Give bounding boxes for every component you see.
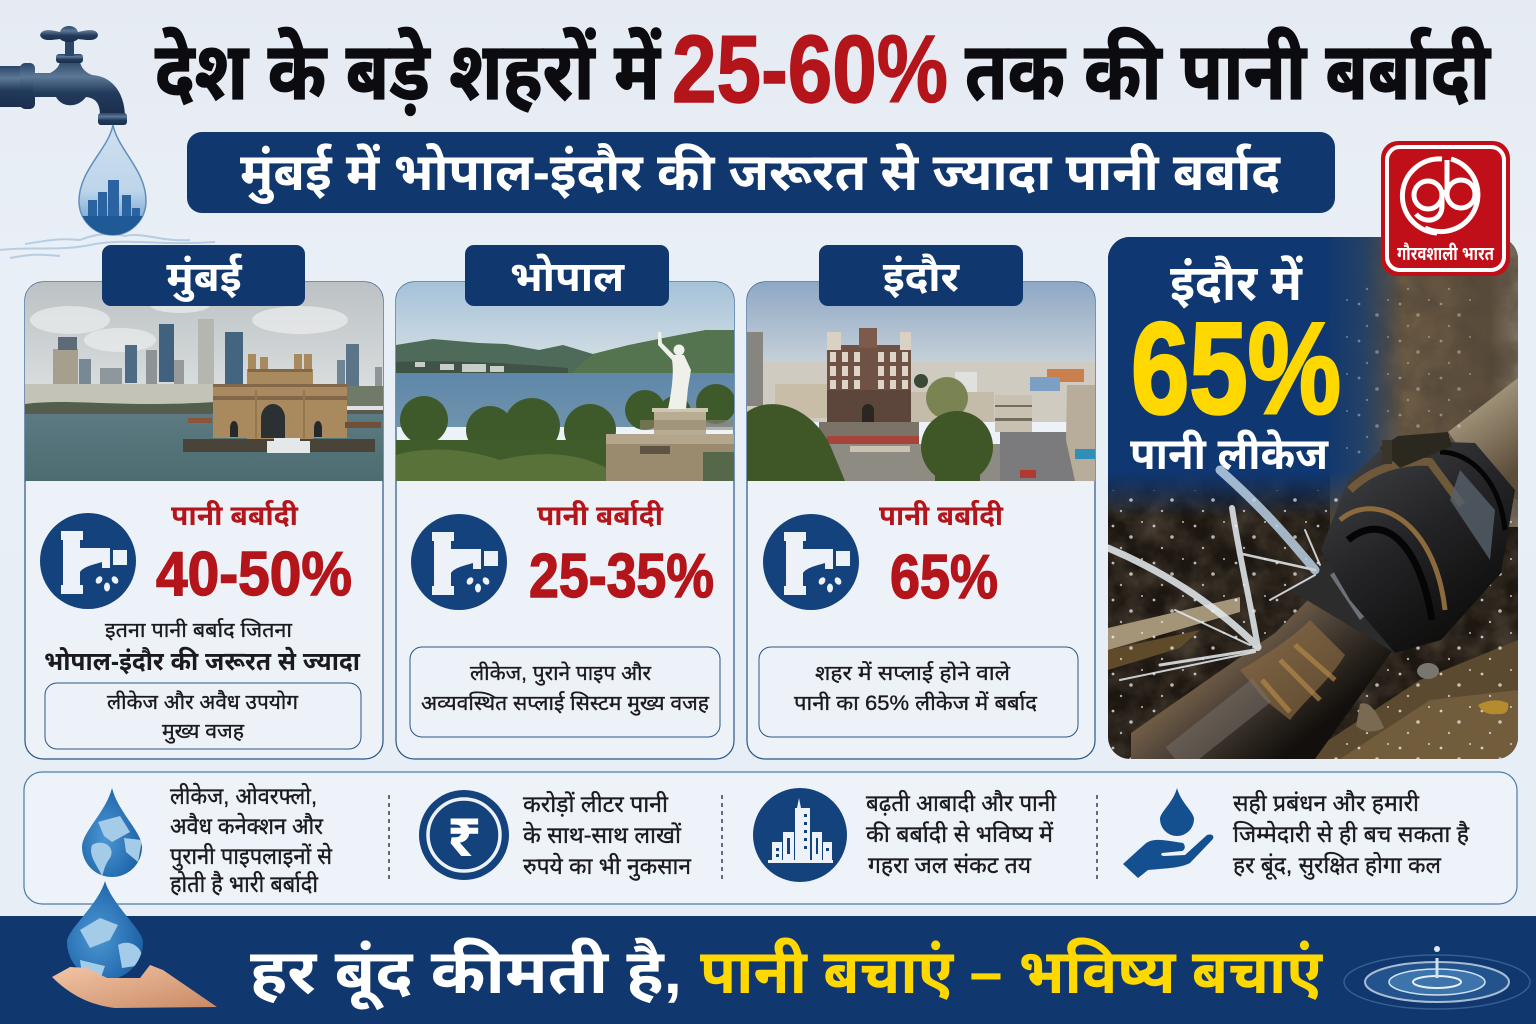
photo: leaking pipe xyxy=(1131,432,1515,770)
callout: Indore cause: पानी का 65% लीकेज में बर्बाद xyxy=(794,691,1038,715)
photo: Bhopal lake and statue xyxy=(396,282,736,481)
callout: Bhopal cause: लीकेज, पुराने पाइप और xyxy=(470,661,651,686)
photo: Indore Rajwada palace xyxy=(747,282,1095,483)
logo: Gauravshali Bharat: गौरवशाली भारत xyxy=(1397,243,1495,265)
callout: Indore cause xyxy=(759,647,1078,737)
panel: Indore 65% leakage: 65% xyxy=(1131,295,1341,441)
panel: Indore card xyxy=(747,245,1095,759)
slogan: पानी बचाएं – भविष्य बचाएं xyxy=(700,937,1323,1007)
icon: water drop with city xyxy=(78,125,148,236)
photo: wall and upper pipe xyxy=(1108,237,1518,759)
callout: Bhopal cause xyxy=(410,647,720,737)
text: responsibility xyxy=(1233,790,1470,880)
text: leakage causes: अवैध कनेक्शन और xyxy=(170,813,324,839)
icon: leaking pipe xyxy=(411,514,507,610)
stat: Indore water waste xyxy=(879,499,1004,612)
panel: Indore 65% leakage: पानी लीकेज xyxy=(1130,428,1329,479)
tab: Mumbai xyxy=(102,245,305,306)
text: responsibility: जिम्मेदारी से ही बच सकता है xyxy=(1233,821,1470,847)
panel: footer banner xyxy=(0,881,1536,1024)
slogan: हर बूंद कीमती है, xyxy=(250,936,682,1011)
slogan xyxy=(250,936,1323,1011)
panel: Indore 65% leakage: इंदौर में xyxy=(1170,255,1303,311)
text: money loss: के साथ-साथ लाखों xyxy=(523,822,682,848)
tab: Indore: इंदौर xyxy=(883,253,961,300)
icon: leaking pipe xyxy=(763,514,859,610)
tab: Bhopal xyxy=(465,245,669,306)
text: future crisis xyxy=(866,790,1057,878)
icon: faucet xyxy=(0,26,127,125)
stat: Mumbai water waste: पानी बर्बादी xyxy=(171,499,299,531)
title: देश के बड़े शहरों में xyxy=(155,26,662,116)
text: leakage causes: होती है भारी बर्बादी xyxy=(170,871,319,897)
icon: hand with drop xyxy=(1123,788,1213,878)
text: leakage causes: लीकेज, ओवरफ्लो, xyxy=(170,783,317,809)
navy overlay xyxy=(1108,237,1398,513)
text: leakage causes xyxy=(170,783,332,897)
tab: Bhopal: भोपाल xyxy=(510,253,625,300)
text: leakage causes: पुरानी पाइपलाइनों से xyxy=(170,843,332,871)
panel: Indore 65% leakage xyxy=(1108,237,1518,770)
stat: Bhopal water waste: पानी बर्बादी xyxy=(537,499,664,531)
text: responsibility: हर बूंद, सुरक्षित होगा कल xyxy=(1233,852,1441,880)
icon: globe drop xyxy=(82,788,142,877)
text: Mumbai comparison: इतना पानी बर्बाद जितना xyxy=(105,618,293,642)
icon: hand holding globe drop xyxy=(52,881,217,1008)
stat: Bhopal water waste: 25-35% xyxy=(529,542,714,611)
icon: rupee xyxy=(419,790,509,880)
panel: Bhopal card xyxy=(396,245,736,759)
icon: water ripple xyxy=(1344,946,1530,1009)
stat: Mumbai water waste xyxy=(156,499,352,609)
text: money loss xyxy=(523,791,692,881)
text: Mumbai comparison: भोपाल-इंदौर की जरूरत से ज्यादा xyxy=(44,646,361,676)
text: responsibility: सही प्रबंधन और हमारी xyxy=(1233,790,1420,816)
title: 25-60% xyxy=(672,16,948,123)
text: future crisis: बढ़ती आबादी और पानी xyxy=(866,790,1057,816)
logo: Gauravshali Bharat xyxy=(1381,141,1510,276)
icon: leaking pipe xyxy=(40,513,136,609)
text: money loss: करोड़ों लीटर पानी xyxy=(523,791,669,817)
stat: Indore water waste: 65% xyxy=(890,543,998,612)
tab: Mumbai: मुंबई xyxy=(166,253,243,302)
panel: facts strip xyxy=(24,772,1517,904)
stat: Indore water waste: पानी बर्बादी xyxy=(879,499,1004,531)
photo: Mumbai skyline and Gateway of India xyxy=(25,282,383,481)
callout: Mumbai cause: मुख्य वजह xyxy=(162,720,245,744)
text: future crisis: की बर्बादी से भविष्य में xyxy=(866,821,1054,847)
text: future crisis: गहरा जल संकट तय xyxy=(868,852,1032,878)
callout: Bhopal cause: अव्यवस्थित सप्लाई सिस्टम मुख्य वजह xyxy=(421,691,710,716)
water spray xyxy=(1108,470,1320,680)
water splash under drop xyxy=(0,234,215,258)
panel: Mumbai card xyxy=(25,245,383,759)
subtitle banner: मुंबई में भोपाल-इंदौर की जरूरत से ज्यादा पानी बर्बाद xyxy=(240,143,1281,205)
subtitle banner xyxy=(187,132,1335,213)
stat: Mumbai water waste: 40-50% xyxy=(156,540,352,609)
tab: Indore xyxy=(819,245,1023,306)
title xyxy=(155,16,1491,123)
stat: Bhopal water waste xyxy=(529,499,714,611)
text: money loss: रुपये का भी नुकसान xyxy=(523,853,692,881)
icon: rupee: ₹ xyxy=(447,802,481,869)
callout: Mumbai cause xyxy=(45,683,361,749)
specks xyxy=(1108,280,1518,759)
icon: city buildings xyxy=(753,788,847,882)
callout: Indore cause: शहर में सप्लाई होने वाले xyxy=(815,661,1011,685)
callout: Mumbai cause: लीकेज और अवैध उपयोग xyxy=(107,689,299,714)
text: Mumbai comparison xyxy=(44,618,361,676)
